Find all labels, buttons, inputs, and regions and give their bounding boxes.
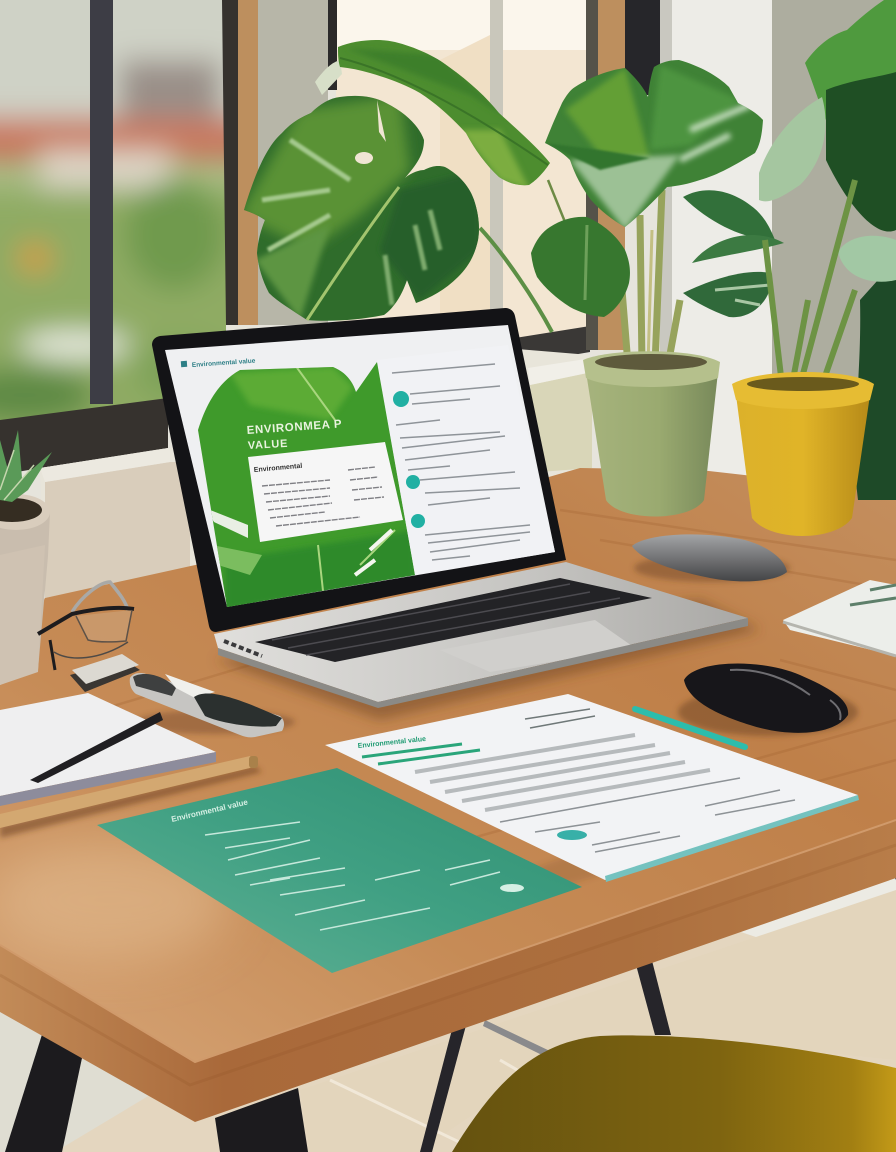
laptop display: VALUE: [248, 438, 289, 452]
right window view: [328, 0, 590, 364]
wooden window frame: [238, 0, 259, 325]
plant: central large leaf: [545, 60, 763, 230]
left window with blurred garden: [0, 0, 226, 425]
laptop: [152, 308, 748, 708]
trackpad: [440, 620, 635, 672]
wall and floor below table: [0, 850, 896, 1152]
wood and dark frame right: [586, 0, 660, 350]
keyboard: [255, 578, 652, 662]
laptop screen bezel: [152, 308, 566, 632]
white document: [325, 694, 859, 917]
plant: right foliage: [759, 0, 896, 500]
table legs: [5, 848, 896, 1152]
window frame dark: [0, 0, 240, 475]
white booklet right: [783, 580, 896, 656]
laptop base: [214, 562, 748, 702]
black computer mouse: [678, 664, 858, 736]
wooden pencil: [0, 756, 262, 838]
table shadow under laptop: [215, 600, 760, 720]
teal flyer: Environmental value: [170, 797, 249, 824]
screen monstera leaf: [190, 360, 420, 610]
window sill: [40, 325, 592, 598]
wireless mouse silver: [632, 534, 790, 582]
screen header label: Environmental value: [192, 358, 256, 369]
small device near glasses: [70, 654, 140, 692]
laptop display: [165, 325, 555, 610]
teal pen: [635, 709, 745, 747]
yellow plant pot: [732, 372, 874, 536]
plant: round leaf: [531, 217, 630, 317]
notebook: [0, 693, 216, 806]
laptop ports: [224, 641, 262, 656]
screen right text column: [377, 345, 555, 575]
teal flyer: [97, 768, 582, 973]
window mullion: [90, 0, 113, 404]
right wall: [660, 0, 896, 480]
wall pier: [258, 0, 328, 325]
screen white card: Environmental: [254, 463, 303, 474]
plant: stems: [480, 180, 680, 365]
succulent in pot: [0, 430, 52, 685]
screen white card: [248, 442, 403, 542]
white document: Environmental value: [357, 736, 426, 750]
pen on notebook: [30, 712, 163, 783]
eyeglasses: [38, 582, 134, 670]
plant: lower dark leaves: [683, 190, 784, 317]
table top: [0, 468, 896, 1122]
plant: monstera leaf: [240, 95, 480, 321]
screen heading: ENVIRONMEA P: [246, 418, 343, 437]
green plant pot: [583, 351, 720, 516]
plant: arching leaf: [315, 40, 550, 190]
laptop front edge: [218, 618, 748, 708]
chair: [452, 1035, 896, 1152]
remote control: [130, 673, 295, 737]
